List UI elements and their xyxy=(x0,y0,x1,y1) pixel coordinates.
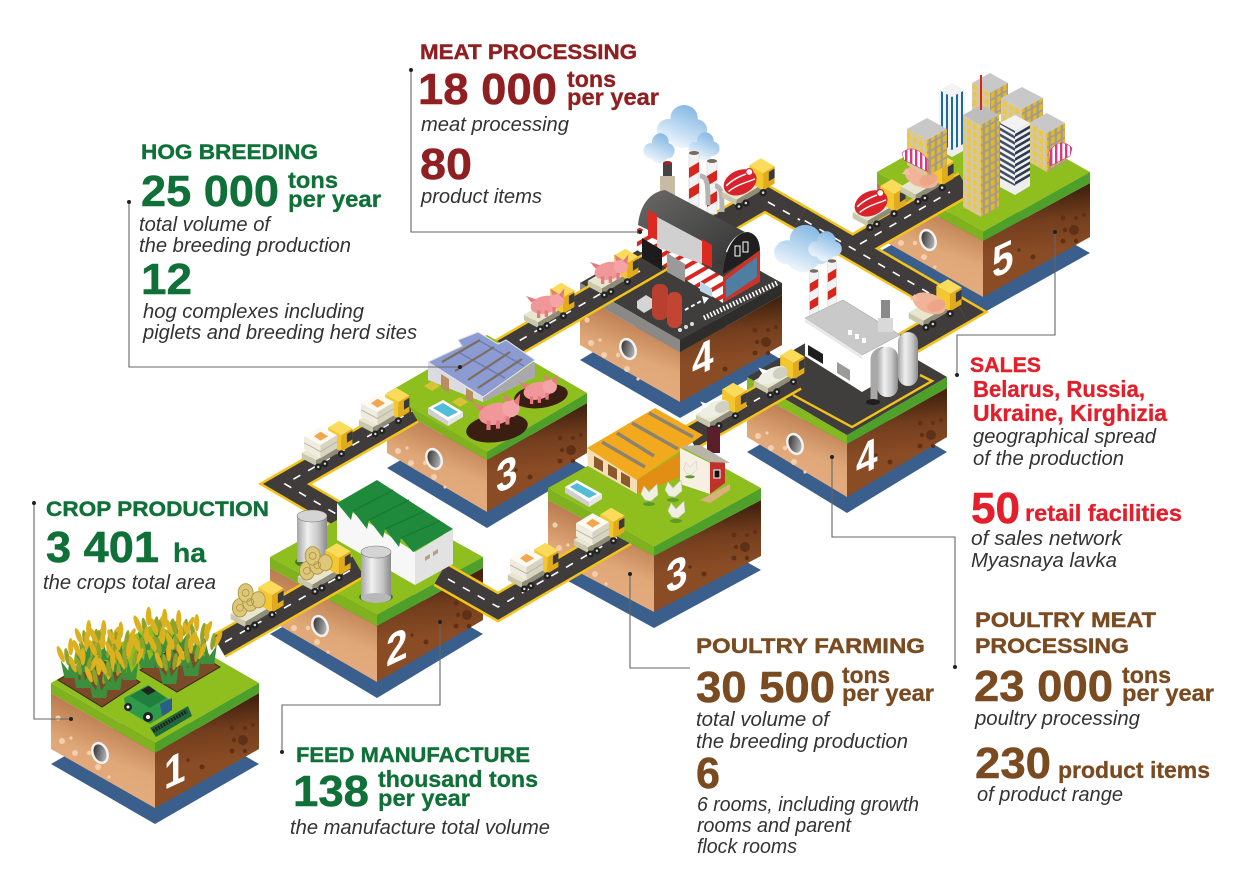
road: hog farm to meat plant xyxy=(495,198,800,355)
text block: poultry meat processing: poultry processing xyxy=(974,708,1140,730)
text block: sales: geographical spread xyxy=(973,426,1157,448)
icon: poultry processing plant xyxy=(774,225,918,405)
text block: poultry meat processing: 23 000 xyxy=(974,662,1113,711)
truck: sacks 2 xyxy=(359,388,409,438)
truck: meat to sales xyxy=(719,158,775,210)
text block: hog breeding: 12 xyxy=(141,255,192,304)
text block: hog breeding: 25 000 xyxy=(141,167,279,216)
block 1: crop production xyxy=(51,623,259,824)
text block: poultry farming: tons xyxy=(842,662,890,688)
block 4: poultry meat processing xyxy=(747,319,947,513)
truck: hay 1 xyxy=(231,580,284,632)
icon: chicken trough xyxy=(565,480,602,507)
truck: pig xyxy=(524,283,574,333)
text block: hog breeding: piglets and breeding herd sites xyxy=(142,322,417,344)
block 2: feed manufacture xyxy=(270,498,483,698)
hog block grass overlay xyxy=(387,335,587,452)
icon: meat plant yard equipment xyxy=(637,284,709,332)
text block: sales: Ukraine, Kirghizia xyxy=(973,400,1167,426)
leader: feed manufacture xyxy=(280,620,442,754)
road: poultry farm to poultry plant xyxy=(690,378,795,438)
step number 4 poultry meat: 4 xyxy=(856,428,878,487)
text block: poultry meat processing: PROCESSING xyxy=(975,634,1129,658)
text block: hog breeding: HOG BREEDING xyxy=(141,140,318,164)
road: feed mill to hog farm xyxy=(285,411,412,522)
step number 1: 1 xyxy=(164,741,186,800)
text block: meat processing: tons xyxy=(567,66,616,92)
block 5: sales city xyxy=(877,112,1090,313)
text block: poultry meat processing: tons xyxy=(1122,662,1171,688)
road: sales road section xyxy=(790,184,965,345)
block 3: hog breeding xyxy=(387,335,587,528)
text block: poultry meat processing xyxy=(974,608,1214,806)
text block: crop production xyxy=(43,497,269,594)
text block: meat processing: MEAT PROCESSING xyxy=(420,40,637,64)
truck: roast on branch xyxy=(901,153,954,205)
text block: feed manufacture: the manufacture total volume xyxy=(290,817,550,839)
step number 4 meat: 4 xyxy=(692,329,714,388)
text block: hog breeding: the breeding production xyxy=(139,235,351,257)
text block: crop production: the crops total area xyxy=(43,572,216,594)
text block: poultry farming: total volume of xyxy=(696,709,831,731)
text block: sales: SALES xyxy=(970,353,1041,377)
text block: poultry farming: the breeding production xyxy=(696,731,908,753)
truck: live birds 2 xyxy=(754,349,804,399)
icon: meat plant building with chimneys xyxy=(637,105,760,303)
step number 3 poultry: 3 xyxy=(666,545,688,604)
text block: feed manufacture: FEED MANUFACTURE xyxy=(296,743,530,767)
truck: hay 2 xyxy=(298,543,351,595)
icon: chicken coop xyxy=(680,427,730,503)
text block: crop production: 3 401 xyxy=(46,523,159,572)
leader: poultry meat processing xyxy=(830,455,957,669)
text block: sales: of sales network xyxy=(971,528,1123,550)
text block: meat processing: per year xyxy=(567,84,659,110)
text block: hog breeding: total volume of xyxy=(139,214,272,236)
icon: front silo xyxy=(359,546,393,603)
truck: sacks 3 xyxy=(508,543,558,593)
text block: poultry farming xyxy=(696,634,934,858)
text block: feed manufacture: thousand tons xyxy=(378,766,538,792)
icon: hens xyxy=(641,480,685,523)
text block: hog breeding xyxy=(139,140,417,344)
text block: hog breeding: tons xyxy=(288,167,338,193)
text block: sales xyxy=(970,353,1182,572)
text block: meat processing: 18 000 xyxy=(418,65,557,114)
text block: poultry farming: rooms and parent xyxy=(697,815,852,837)
text block: poultry meat processing: 230 xyxy=(975,739,1051,788)
icon: combine harvester xyxy=(124,685,192,737)
text block: meat processing: product items xyxy=(420,186,542,208)
text block: poultry farming: 6 rooms, including growth xyxy=(697,794,919,816)
leader: poultry farming xyxy=(628,572,690,668)
road: feed mill to poultry farm xyxy=(440,529,632,607)
leader: meat processing xyxy=(409,68,642,234)
text block: meat processing: 80 xyxy=(420,140,472,189)
leader: sales xyxy=(955,230,1057,377)
text block: feed manufacture xyxy=(290,743,550,839)
road: upper road into poultry plant xyxy=(882,312,962,358)
poultry block grass top xyxy=(548,429,761,556)
text block: meat processing: meat processing xyxy=(421,114,569,136)
text block: meat processing xyxy=(418,40,659,208)
text block: sales: retail facilities xyxy=(1025,500,1182,526)
text block: poultry meat processing: product items xyxy=(1058,757,1210,783)
text block: poultry farming: POULTRY FARMING xyxy=(696,634,925,658)
step number 2: 2 xyxy=(386,618,408,677)
icon: mud and pigs xyxy=(464,374,569,446)
text block: poultry meat processing: POULTRY MEAT xyxy=(975,608,1156,632)
text block: sales: Belarus, Russia, xyxy=(973,376,1145,402)
text block: poultry meat processing: per year xyxy=(1122,680,1214,706)
text block: hog breeding: per year xyxy=(288,186,381,212)
truck: sacks 4 xyxy=(574,508,624,558)
text block: poultry farming: flock rooms xyxy=(697,836,797,858)
truck: sacks xyxy=(302,421,352,471)
step number 3 hogs: 3 xyxy=(496,445,518,504)
text block: poultry meat processing: of product range xyxy=(977,784,1123,806)
text block: poultry farming: 30 500 xyxy=(696,663,835,712)
leader: hog breeding xyxy=(127,200,462,369)
text block: sales: of the production xyxy=(973,448,1124,470)
icon: city buildings xyxy=(902,73,1072,217)
leader: crop production xyxy=(32,501,73,721)
text block: sales: Myasnaya lavka xyxy=(971,550,1117,572)
text block: crop production: ha xyxy=(173,538,207,568)
text block: feed manufacture: 138 xyxy=(293,767,369,816)
text block: poultry farming: per year xyxy=(842,680,934,706)
truck: pig 2 xyxy=(588,249,638,299)
step number 5: 5 xyxy=(992,230,1014,289)
block 3: poultry farming xyxy=(548,500,761,628)
icon: water trough xyxy=(428,400,463,426)
text block: feed manufacture: per year xyxy=(378,785,470,811)
text block: poultry farming: 6 xyxy=(696,749,720,798)
block 4: meat processing xyxy=(580,226,782,418)
road: crop field to feed mill xyxy=(219,566,358,646)
icon: feed mill building xyxy=(295,480,453,585)
icon: crop beds with wheat xyxy=(55,607,224,707)
text block: hog breeding: hog complexes including xyxy=(143,301,364,323)
truck: live birds 1 xyxy=(696,383,746,433)
truck: meat on branch xyxy=(850,179,906,231)
text block: crop production: CROP PRODUCTION xyxy=(46,497,269,521)
icon: poultry barn xyxy=(587,408,703,494)
icon: hog barn xyxy=(424,332,535,407)
truck: roast at corner xyxy=(909,279,962,331)
text block: sales: 50 xyxy=(971,484,1020,533)
